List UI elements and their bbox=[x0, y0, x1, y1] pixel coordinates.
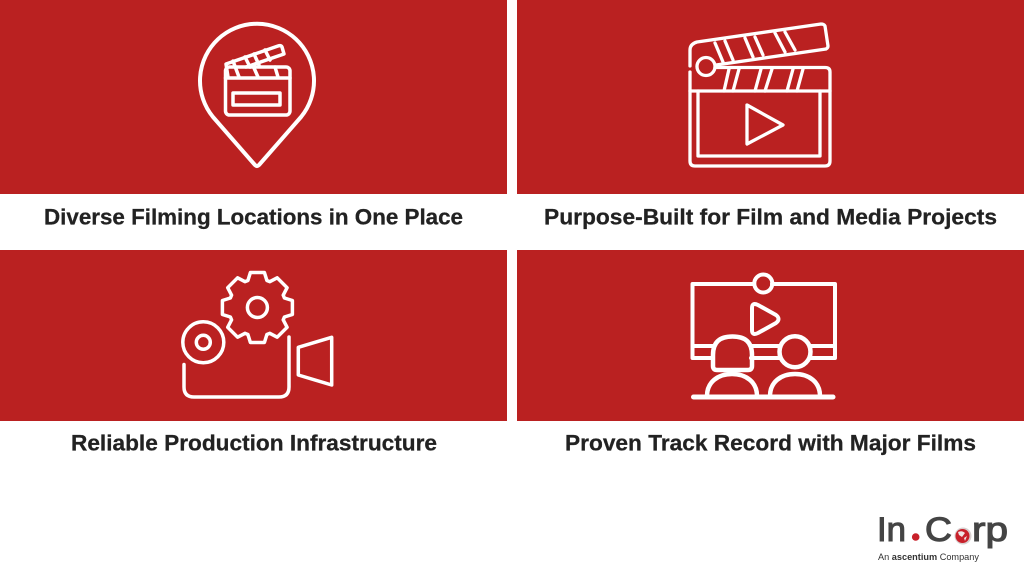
panel: proven track record bbox=[517, 250, 1024, 421]
panel: reliable infrastructure bbox=[0, 250, 507, 421]
panel: purpose-built bbox=[517, 0, 1024, 194]
logo: InCorp: An ascentium Company bbox=[878, 552, 979, 563]
heading: reliable infrastructure: Reliable Production Infrastructure bbox=[71, 430, 437, 456]
heading: diverse filming locations: Diverse Filming Locations in One Place bbox=[44, 204, 463, 230]
logo: InCorp: In bbox=[877, 511, 906, 549]
logo: InCorp: rp bbox=[972, 511, 1008, 549]
heading: proven track record: Proven Track Record with Major Films bbox=[565, 430, 976, 456]
panel: diverse filming locations bbox=[0, 0, 507, 194]
icon: map pin with clapperboard bbox=[200, 24, 314, 166]
logo: InCorp: C bbox=[925, 511, 952, 549]
icon: video camera with gear bbox=[183, 272, 332, 397]
icon: clapperboard with play button bbox=[690, 24, 830, 166]
icon: audience watching a screen bbox=[692, 274, 835, 397]
heading: purpose-built: Purpose-Built for Film and Media Projects bbox=[544, 204, 997, 230]
logo: InCorp bbox=[877, 511, 1008, 563]
